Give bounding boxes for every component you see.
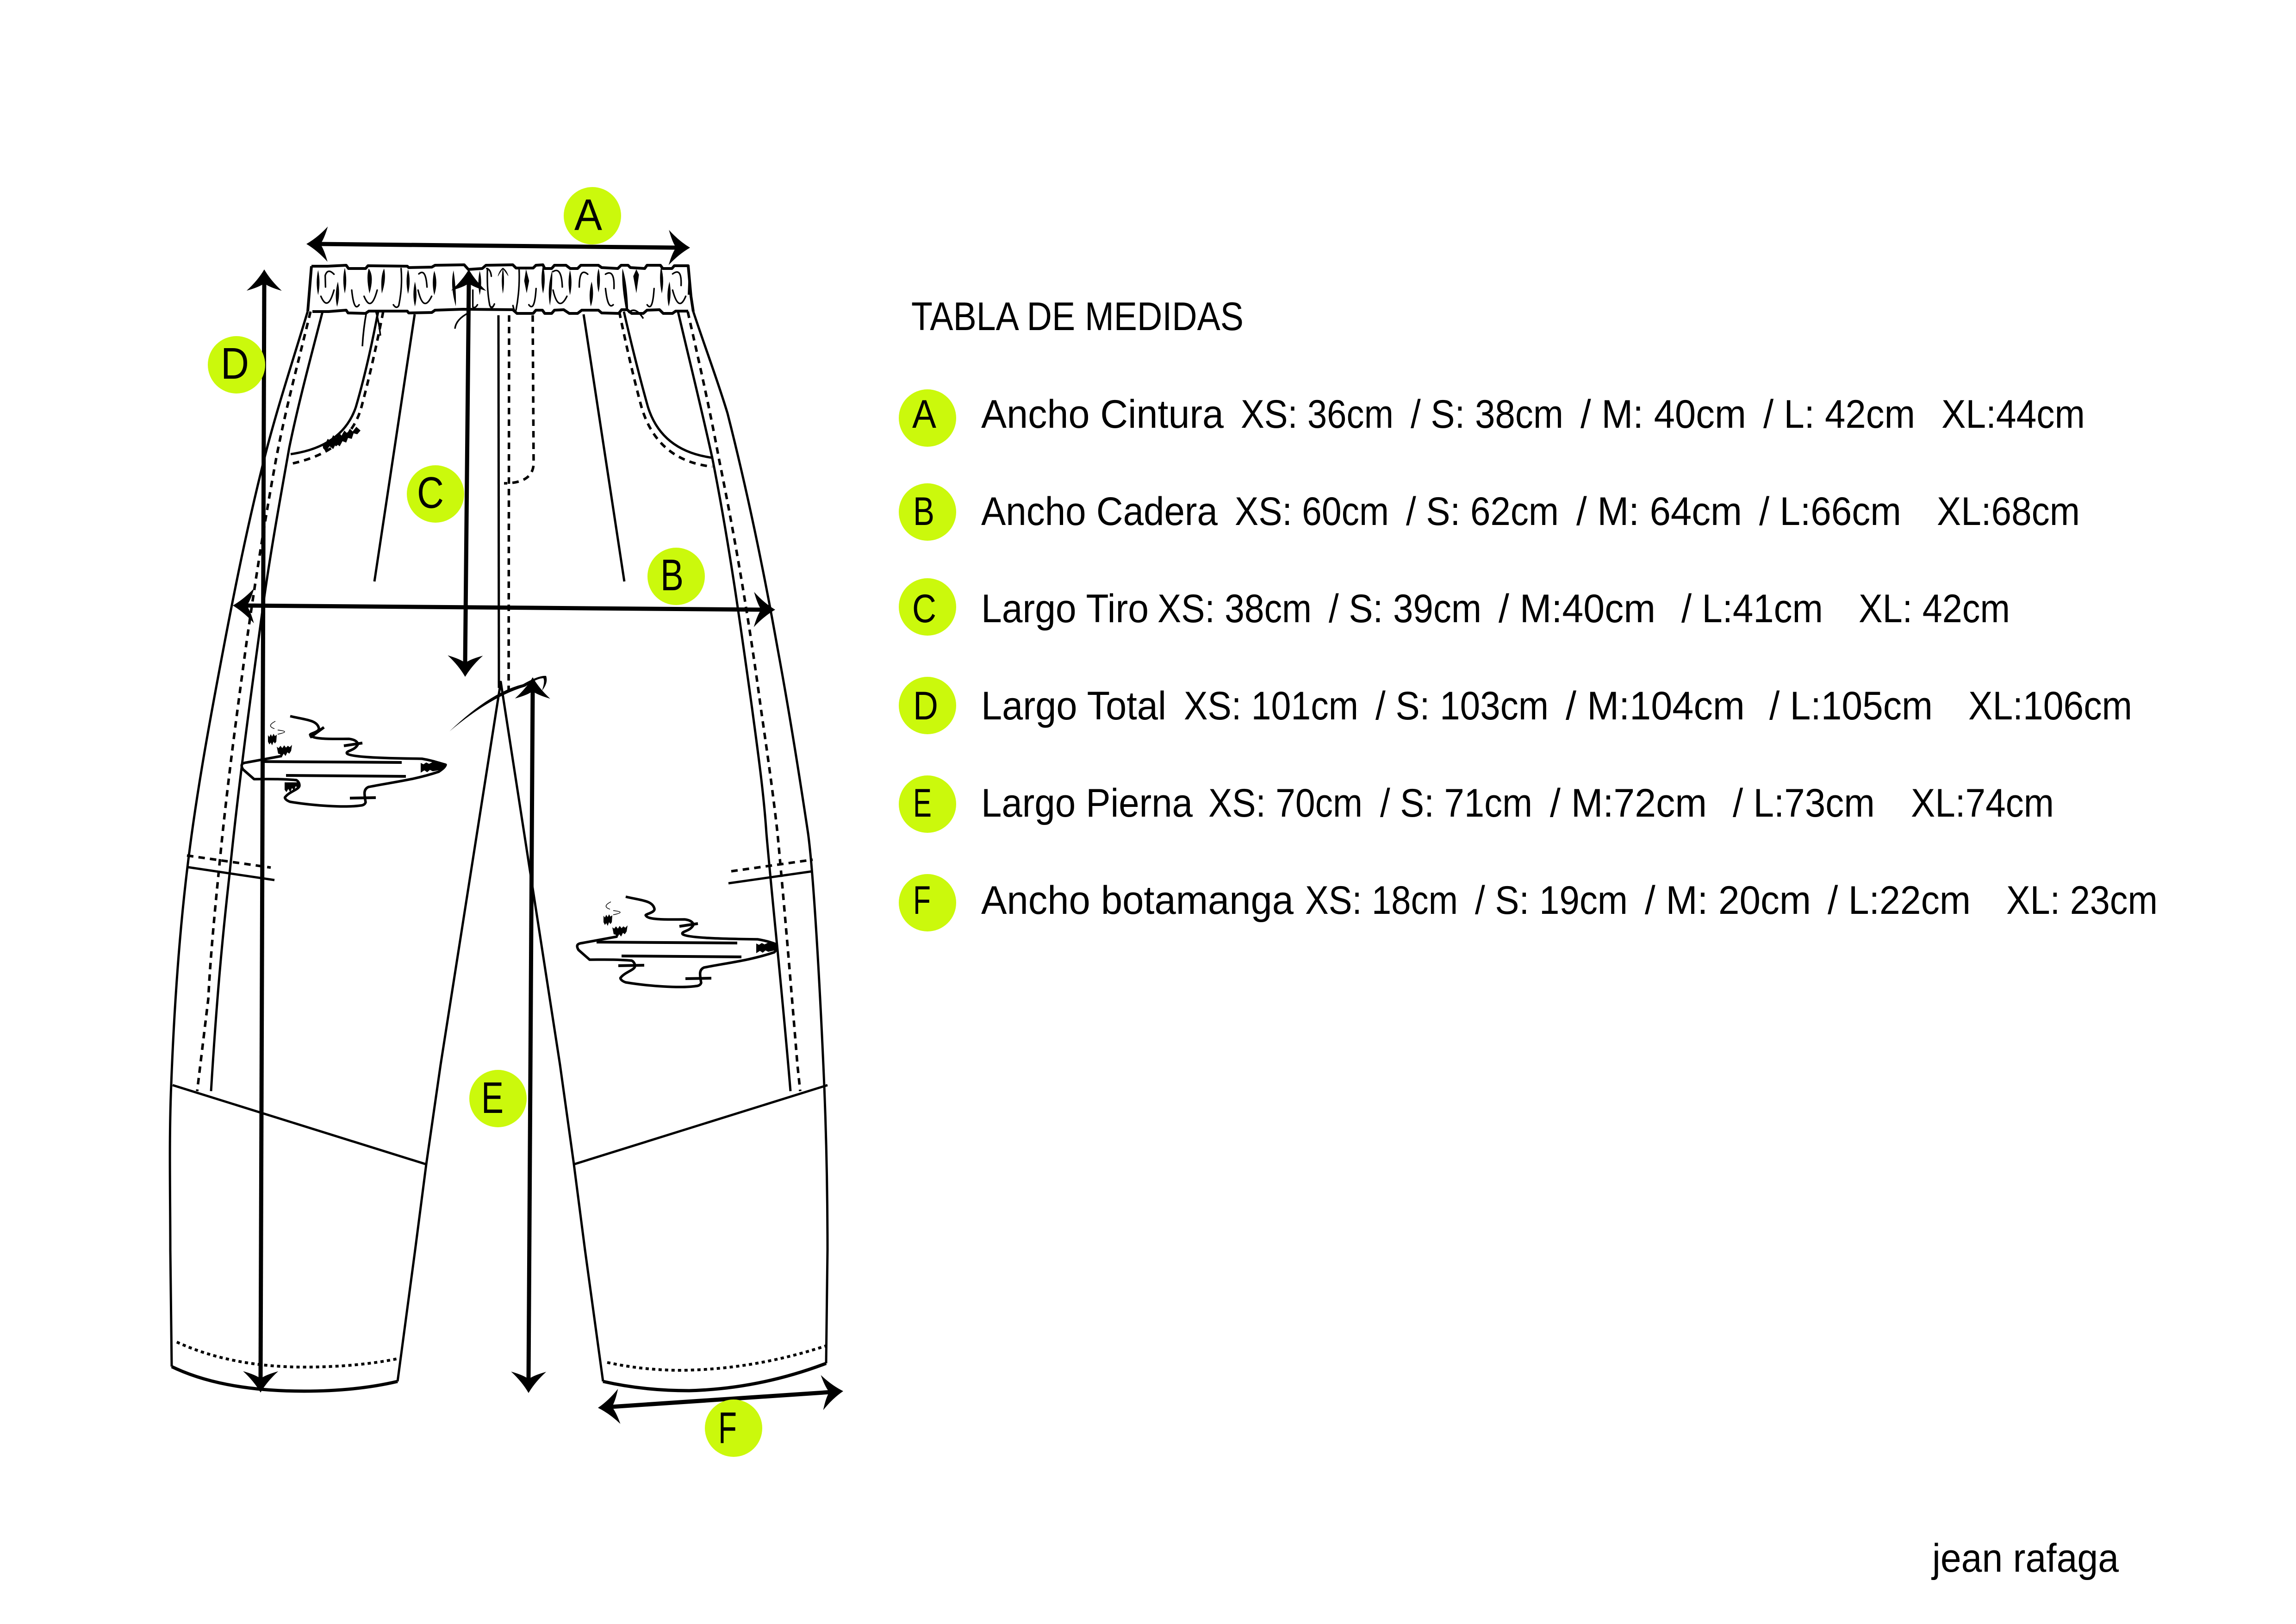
diagram badge C <box>407 465 464 523</box>
row C: rise: / S: 39cm <box>1329 587 1481 631</box>
row C: rise: C <box>912 587 936 631</box>
right hem stitch <box>607 1346 826 1370</box>
patch faint thread <box>270 721 285 734</box>
row D: total length <box>899 677 2132 734</box>
knee seams <box>187 867 813 883</box>
diagram badge C: C <box>417 468 444 518</box>
brand signature: jean rafaga <box>1931 1536 2119 1580</box>
row A: waist width: / M: 40cm <box>1580 392 1746 437</box>
gathers left half <box>317 268 508 307</box>
row E: leg length: / S: 71cm <box>1380 781 1532 825</box>
patch dark frayed spots <box>604 914 778 953</box>
right hem <box>603 1363 826 1391</box>
row B: hip width: XL:68cm <box>1937 489 2080 534</box>
row B: hip width: / M: 64cm <box>1576 489 1742 534</box>
small stitch marks under waistband <box>362 310 643 346</box>
arrow F hem width <box>597 1374 845 1425</box>
row A: waist width <box>899 389 2085 447</box>
row C: rise <box>899 578 2010 636</box>
row C: rise: XL: 42cm <box>1859 587 2010 631</box>
row D: total length: / M:104cm <box>1566 684 1745 728</box>
right side panel seam <box>678 312 790 1091</box>
diagram badge E <box>469 1070 527 1127</box>
left side panel seam <box>211 312 323 1091</box>
pocket distress mark <box>323 427 361 451</box>
row A: waist width: / S: 38cm <box>1411 392 1563 437</box>
left side topstitch <box>197 312 311 1091</box>
row F: hem width: XS: 18cm <box>1305 878 1458 923</box>
size table <box>899 389 2158 931</box>
diagram badge B <box>647 548 705 605</box>
garment drawing: trousers flat sketch <box>170 265 828 1391</box>
row C: rise: / M:40cm <box>1499 587 1655 631</box>
left leg distressed patch <box>242 716 446 806</box>
row D: total length: / S: 103cm <box>1375 684 1549 728</box>
row A: waist width: / L: 42cm <box>1763 392 1915 437</box>
row F: hem width <box>899 874 2158 931</box>
row D: total length: XS: 101cm <box>1184 684 1358 728</box>
row A: waist width: XS: 36cm <box>1241 392 1394 437</box>
arrow D total length <box>243 269 282 1393</box>
right side topstitch <box>688 312 800 1091</box>
row E: leg length: E <box>913 781 932 825</box>
title: TABLA DE MEDIDAS <box>911 294 1244 339</box>
fly topstitch <box>504 315 534 694</box>
row E: leg length <box>899 775 2054 833</box>
diagram badge E: E <box>481 1073 504 1123</box>
patch outline <box>577 897 777 987</box>
lower leg panel seams <box>173 1085 828 1164</box>
row C: rise: XS: 38cm <box>1157 587 1312 631</box>
row D: total length: Largo Total <box>981 684 1166 728</box>
pleats <box>374 314 624 581</box>
row E: leg length: / M:72cm <box>1550 781 1707 825</box>
row A: waist width: Ancho Cintura <box>981 392 1224 437</box>
row D: total length: D <box>913 684 938 728</box>
row B: hip width: / S: 62cm <box>1406 489 1559 534</box>
diagram badge A: A <box>574 190 602 240</box>
row B: hip width <box>899 483 2080 541</box>
diagram badge F <box>705 1399 762 1457</box>
row F: hem width: F <box>913 878 931 923</box>
row E: leg length: / L:73cm <box>1733 781 1875 825</box>
diagram badge B: B <box>660 550 684 600</box>
waistband <box>308 265 693 346</box>
row B: hip width: XS: 60cm <box>1235 489 1389 534</box>
row F: hem width: / M: 20cm <box>1645 878 1811 923</box>
right pocket stitch <box>619 312 712 467</box>
waistband top edge <box>311 265 693 312</box>
row B: hip width: / L:66cm <box>1759 489 1901 534</box>
gathers right half <box>491 265 691 312</box>
waistband bottom edge <box>308 266 688 313</box>
left hem <box>172 1367 398 1391</box>
diagram badge A <box>564 187 621 244</box>
row F: hem width: / S: 19cm <box>1475 878 1628 923</box>
patch frayed lines <box>261 727 406 798</box>
left pocket stitch <box>291 312 383 464</box>
diagram badge D <box>208 336 265 394</box>
row E: leg length: Largo Pierna <box>981 781 1193 825</box>
right pocket <box>624 312 713 458</box>
front centre line <box>498 315 499 688</box>
row D: total length: / L:105cm <box>1769 684 1933 728</box>
measurement arrows <box>233 226 845 1425</box>
row E: leg length: XS: 70cm <box>1208 781 1363 825</box>
row D: total length: XL:106cm <box>1968 684 2132 728</box>
row A: waist width: A <box>912 392 937 437</box>
row C: rise: Largo Tiro <box>981 587 1149 631</box>
left pocket <box>291 312 378 454</box>
row C: rise: / L:41cm <box>1681 587 1823 631</box>
right leg distressed patch <box>577 897 778 987</box>
arrow E leg length <box>511 677 550 1393</box>
patch frayed lines <box>597 924 741 979</box>
row A: waist width: XL:44cm <box>1941 392 2085 437</box>
row B: hip width: B <box>913 489 934 534</box>
row F: hem width: / L:22cm <box>1828 878 1971 923</box>
row B: hip width: Ancho Cadera <box>981 489 1218 534</box>
inseams <box>398 682 603 1381</box>
arrow C rise <box>448 269 486 677</box>
patch outline <box>242 716 446 806</box>
left hem stitch <box>177 1342 398 1367</box>
diagram badge F: F <box>718 1403 737 1453</box>
arrow B hip width <box>233 588 775 627</box>
right leg outer seam <box>693 312 828 1363</box>
knee stitches <box>187 856 813 871</box>
row F: hem width: XL: 23cm <box>2006 878 2158 923</box>
row E: leg length: XL:74cm <box>1911 781 2054 825</box>
left leg outer seam <box>170 311 308 1367</box>
diagram badge D: D <box>221 339 249 388</box>
patch faint thread <box>606 902 620 915</box>
crotch crease flick <box>449 676 547 731</box>
patch dark frayed spots <box>268 734 446 792</box>
arrow A waist width <box>306 226 690 265</box>
row F: hem width: Ancho botamanga <box>981 878 1294 923</box>
